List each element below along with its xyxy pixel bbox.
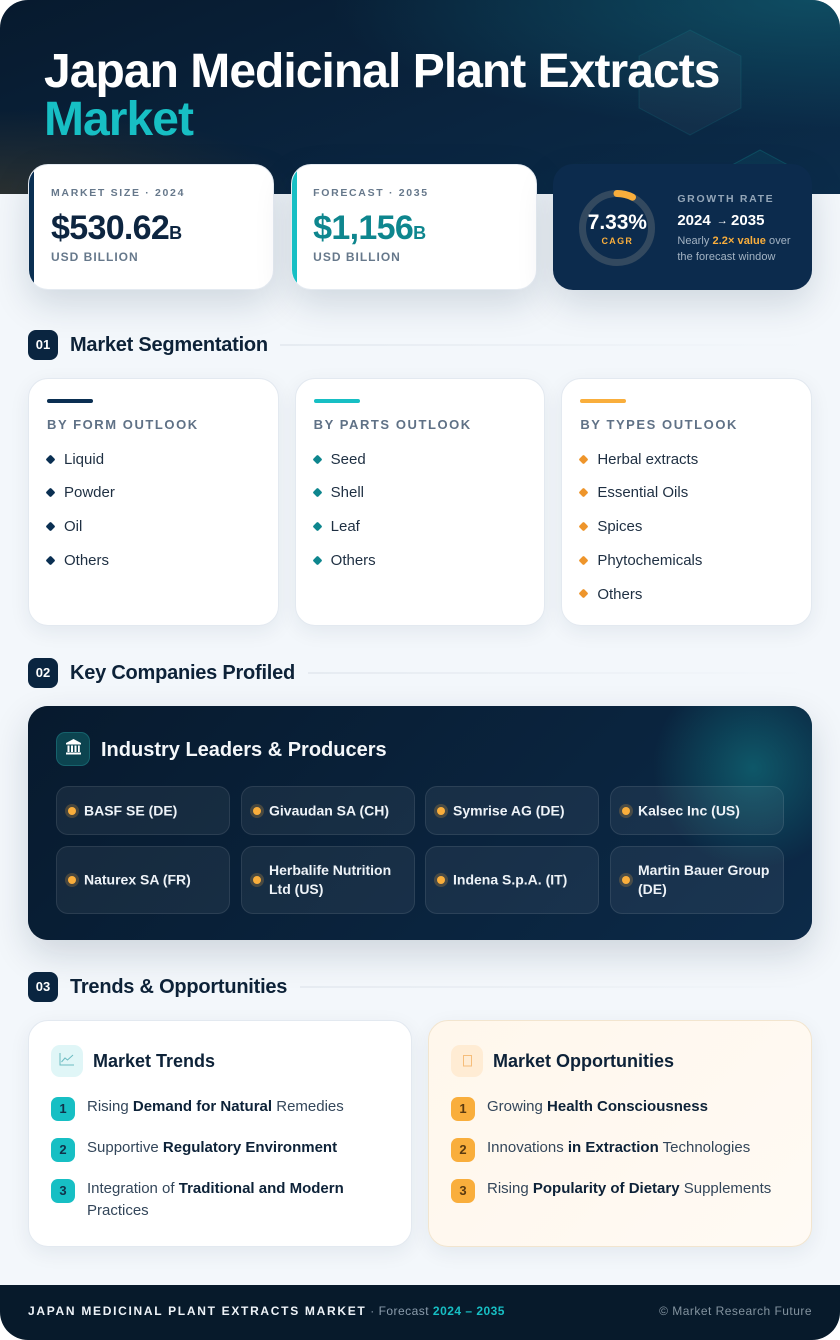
company: BASF: BASF SE (DE) <box>84 802 177 818</box>
company: Herbalife <box>241 846 415 914</box>
panel: by parts: Seed <box>331 450 366 468</box>
panel: market opportunities: 2 <box>459 1142 467 1157</box>
stat card: forecast <box>291 164 537 290</box>
title: Japan Medicinal Plant Extracts <box>44 44 719 98</box>
growth rate card: CAGR <box>601 236 633 246</box>
stat card: market size <box>28 164 274 290</box>
panel: by parts: BY PARTS OUTLOOK <box>314 417 472 432</box>
growth rate card: Nearly 2.2× value over <box>677 234 791 246</box>
company: Martin Bauer <box>610 846 784 914</box>
company: Martin Bauer: Martin Bauer Group (DE) <box>638 862 769 897</box>
panel: by types: BY TYPES OUTLOOK <box>580 417 738 432</box>
panel: by form: Oil <box>64 518 82 535</box>
company: Naturex <box>56 846 230 914</box>
panel: industry leaders <box>28 706 812 940</box>
stat card: market size: $530.62B <box>51 209 182 247</box>
company: Naturex: Naturex SA (FR) <box>84 872 191 888</box>
panel: market opportunities: Rising Popularity of Dietary Supplements <box>487 1180 771 1197</box>
heading: trends: Trends & Opportunities <box>70 976 287 998</box>
section number 03: 03 <box>36 979 50 994</box>
company: Givaudan: Givaudan SA (CH) <box>269 802 389 818</box>
panel: market trends: Supportive Regulatory Environment <box>87 1139 337 1156</box>
panel: by types: Herbal extracts <box>597 450 698 468</box>
company: Symrise <box>425 786 599 835</box>
panel: by parts: Others <box>331 552 376 568</box>
section number 01 <box>28 330 58 360</box>
panel: by form: Powder <box>64 484 115 501</box>
panel: market opportunities: 3 <box>459 1183 467 1198</box>
panel title: Industry Leaders & Producers <box>101 738 387 760</box>
panel: market trends: Market Trends <box>93 1051 215 1071</box>
panel: market trends: 3 <box>59 1183 67 1198</box>
heading: key companies: Key Companies Profiled <box>70 662 295 684</box>
panel: market trends: Integration of Traditional and Modern Practices <box>87 1180 344 1219</box>
section number 02: 02 <box>36 665 50 680</box>
stat card: market size: MARKET SIZE · 2024 <box>51 187 185 199</box>
footer: © Market Research Future <box>659 1304 812 1318</box>
panel: by types <box>561 378 812 626</box>
company: Kalsec <box>610 786 784 835</box>
panel: by parts: Leaf <box>331 518 360 535</box>
panel: market opportunities: Innovations in Extraction Technologies <box>487 1139 750 1156</box>
company: Indena: Indena S.p.A. (IT) <box>453 872 567 888</box>
panel: market trends: Rising Demand for Natural Remedies <box>87 1098 344 1115</box>
footer: JAPAN MEDICINAL PLANT EXTRACTS MARKET · Forecast 2024 – 2035 <box>28 1304 505 1318</box>
panel: by form: BY FORM OUTLOOK <box>47 417 199 432</box>
icon: institution <box>56 732 90 766</box>
panel: by form <box>28 378 279 626</box>
stat card: forecast: $1,156B <box>313 209 426 247</box>
panel: market opportunities <box>428 1020 812 1247</box>
company: BASF <box>56 786 230 835</box>
growth rate card: the forecast window <box>677 250 776 262</box>
stat card: market size: USD BILLION <box>51 250 139 264</box>
growth rate card: 2024 2035 <box>677 212 764 228</box>
heading: market segmentation: Market Segmentation <box>70 334 268 356</box>
panel: by types: Spices <box>597 518 642 535</box>
growth rate card: → <box>716 214 728 226</box>
panel: by form: Liquid <box>64 450 104 468</box>
panel: by types: Phytochemicals <box>597 552 702 568</box>
panel: market opportunities: Market Opportunities <box>493 1051 674 1071</box>
panel: by parts: Shell <box>331 484 364 501</box>
panel: market opportunities: Growing Health Consciousness <box>487 1098 708 1115</box>
panel: market trends: 2 <box>59 1142 67 1157</box>
panel: market trends: 1 <box>59 1101 67 1116</box>
panel: market opportunities: 1 <box>459 1101 467 1116</box>
panel: by parts <box>295 378 545 626</box>
panel: by form: Others <box>64 552 109 568</box>
section number 03 <box>28 972 58 1002</box>
title <box>44 44 719 146</box>
growth rate card <box>553 164 812 290</box>
company: Symrise: Symrise AG (DE) <box>453 802 565 818</box>
hero banner <box>0 0 840 194</box>
section number 02 <box>28 658 58 688</box>
company: Kalsec: Kalsec Inc (US) <box>638 802 740 818</box>
growth rate card: GROWTH RATE <box>677 192 774 204</box>
stat card: forecast: FORECAST · 2035 <box>313 187 429 199</box>
icon: placeholder box <box>451 1045 483 1077</box>
title: Market <box>44 92 193 146</box>
section number 01: 01 <box>36 337 50 352</box>
panel: market trends <box>28 1020 412 1247</box>
icon: chart <box>51 1045 83 1077</box>
footer <box>0 1285 840 1340</box>
panel: by types: Essential Oils <box>597 484 688 501</box>
CAGR ring <box>579 190 655 266</box>
company: Herbalife: Herbalife Nutrition Ltd (US) <box>269 862 391 897</box>
growth rate card: 7.33% <box>588 210 647 234</box>
company: Indena <box>425 846 599 914</box>
company: Givaudan <box>241 786 415 835</box>
stat card: forecast: USD BILLION <box>313 250 401 264</box>
panel: by types: Others <box>597 586 642 602</box>
